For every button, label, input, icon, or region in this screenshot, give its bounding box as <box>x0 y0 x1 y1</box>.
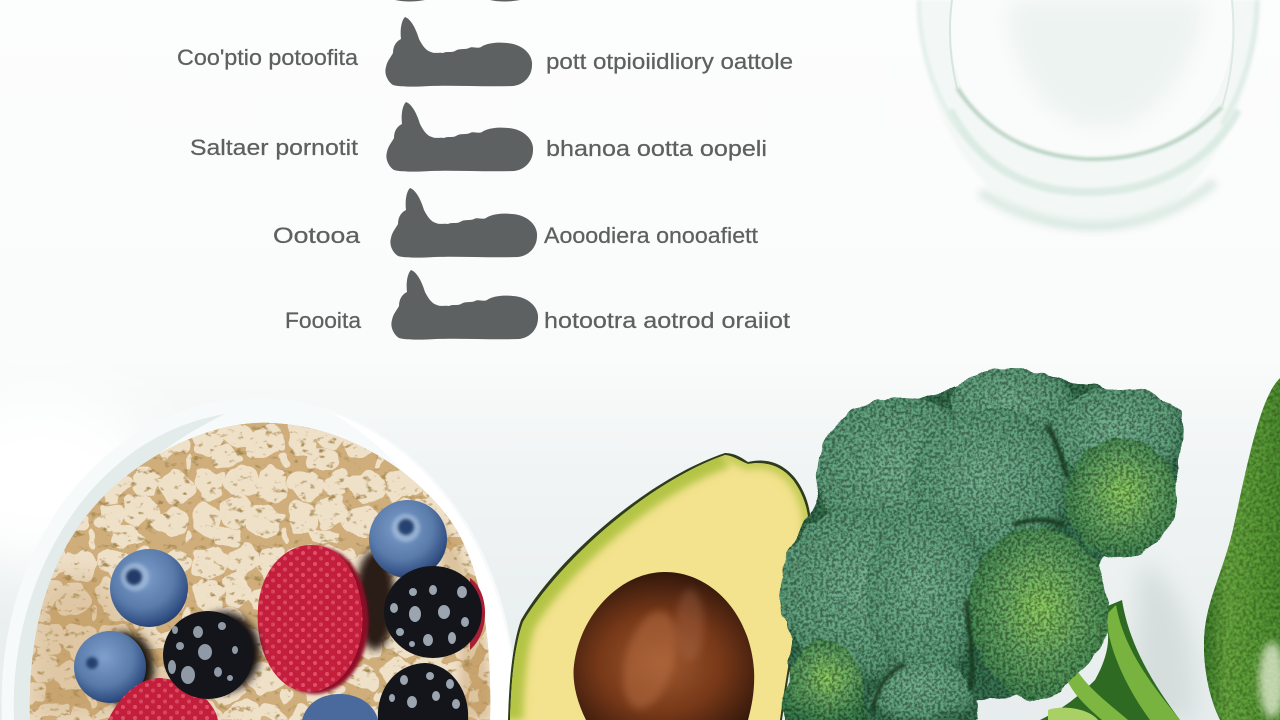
icon: shoe silhouette 4 <box>391 270 538 340</box>
row 1 <box>177 17 793 87</box>
right label 2: bhanoa ootta oopeli <box>546 136 767 161</box>
bowl of oats and berries <box>2 398 516 720</box>
right label 1: pott otpioiidliory oattole <box>546 49 793 74</box>
cucumber <box>1204 378 1280 720</box>
row 4 <box>285 270 790 340</box>
shadow behind broccoli <box>1130 560 1196 720</box>
right label 4: hotootra aotrod oraiiot <box>544 308 790 333</box>
row 3 <box>273 188 758 258</box>
oats <box>20 410 500 720</box>
floret base strip <box>790 700 975 720</box>
broccoli <box>780 368 1185 720</box>
bowl <box>2 398 516 720</box>
top edge fragment of cut-off icon <box>395 0 520 2</box>
left label 4: Foooita <box>285 308 362 333</box>
left label 1: Coo'ptio potoofita <box>177 45 359 70</box>
blackberry 2 <box>384 566 485 658</box>
left label 3: Ootooa <box>273 223 361 248</box>
row 2 <box>190 102 767 172</box>
right label 3: Aooodiera onooafiett <box>544 223 758 248</box>
icon: shoe silhouette 2 <box>386 102 533 172</box>
floret gaps <box>872 425 1068 712</box>
blackberry 1 <box>163 611 260 699</box>
raspberry 1 <box>258 545 368 694</box>
avocado seed <box>574 572 754 720</box>
icon: shoe silhouette 1 <box>385 17 532 87</box>
stem <box>1040 600 1180 720</box>
avocado skin and flesh <box>508 453 811 720</box>
blueberry 1 <box>110 549 188 627</box>
blueberry 2 <box>369 500 447 578</box>
avocado half <box>505 450 815 720</box>
raspberry 2 <box>108 678 218 720</box>
left label 2: Saltaer pornotit <box>190 135 358 160</box>
blueberry 4 <box>302 694 378 720</box>
blackberry 3 <box>378 663 468 720</box>
blueberry 3 <box>74 631 154 704</box>
florets <box>780 368 1185 720</box>
glass of water <box>918 0 1258 231</box>
icon: shoe silhouette 3 <box>390 188 537 258</box>
